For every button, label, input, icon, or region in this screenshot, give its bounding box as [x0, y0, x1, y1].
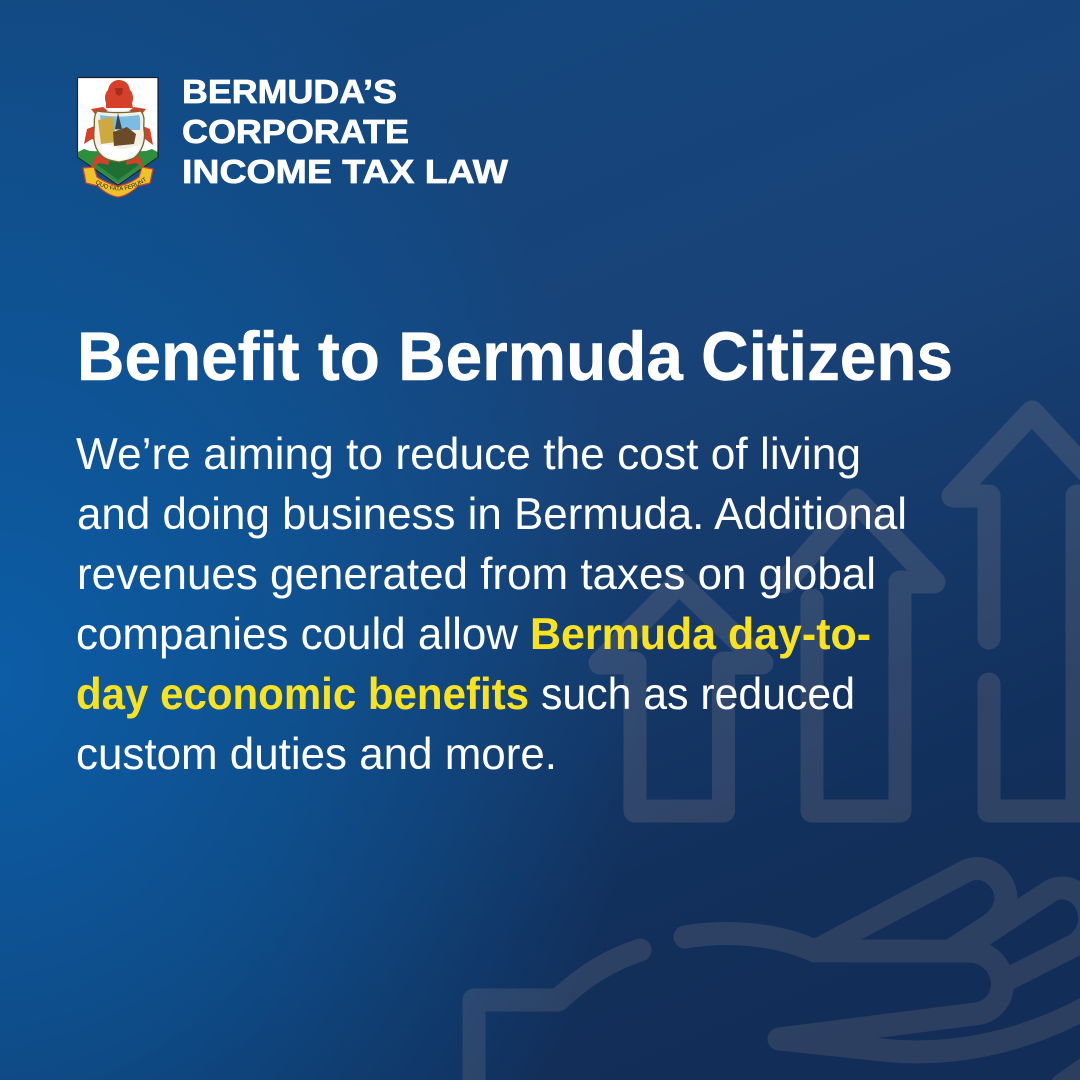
heading: law name: BERMUDA’S: [182, 73, 397, 110]
lion crest: [105, 80, 133, 108]
lion face: [115, 88, 123, 96]
motto: [92, 181, 146, 190]
heading: law name: [182, 73, 509, 190]
dark grass shading: [96, 160, 140, 180]
body text: and doing business in Bermuda. Additional: [77, 490, 907, 539]
cliff: [98, 117, 116, 144]
icon: rising arrows: [600, 412, 1080, 811]
lion supporters: [84, 107, 153, 168]
body text: custom duties and more.: [76, 730, 557, 779]
icon: open hand: [474, 869, 1080, 1080]
ship mast: [115, 113, 122, 129]
logo: Bermuda coat of arms: QUO FATA FERUNT: [96, 177, 146, 190]
inner shield: [94, 111, 145, 162]
heading: law name: CORPORATE: [182, 113, 409, 150]
body text: companies could allow: [76, 610, 519, 659]
body text: [76, 430, 907, 779]
sky: [100, 115, 140, 130]
body text: such as reduced: [541, 670, 855, 719]
shield: [78, 78, 158, 185]
ship: [113, 127, 136, 146]
title: Benefit to Bermuda Citizens: [77, 318, 953, 395]
body text: day economic benefits: [76, 670, 529, 719]
motto scroll: [83, 167, 153, 197]
body text: We’re aiming to reduce the cost of living: [76, 430, 861, 479]
grass: [78, 149, 158, 184]
heading: law name: INCOME TAX LAW: [182, 153, 509, 190]
swan wave: [98, 144, 141, 160]
highlighted text: Bermuda day-to-: [530, 610, 871, 659]
body text: revenues generated from taxes on global: [77, 550, 876, 599]
logo: Bermuda coat of arms: [76, 76, 159, 198]
